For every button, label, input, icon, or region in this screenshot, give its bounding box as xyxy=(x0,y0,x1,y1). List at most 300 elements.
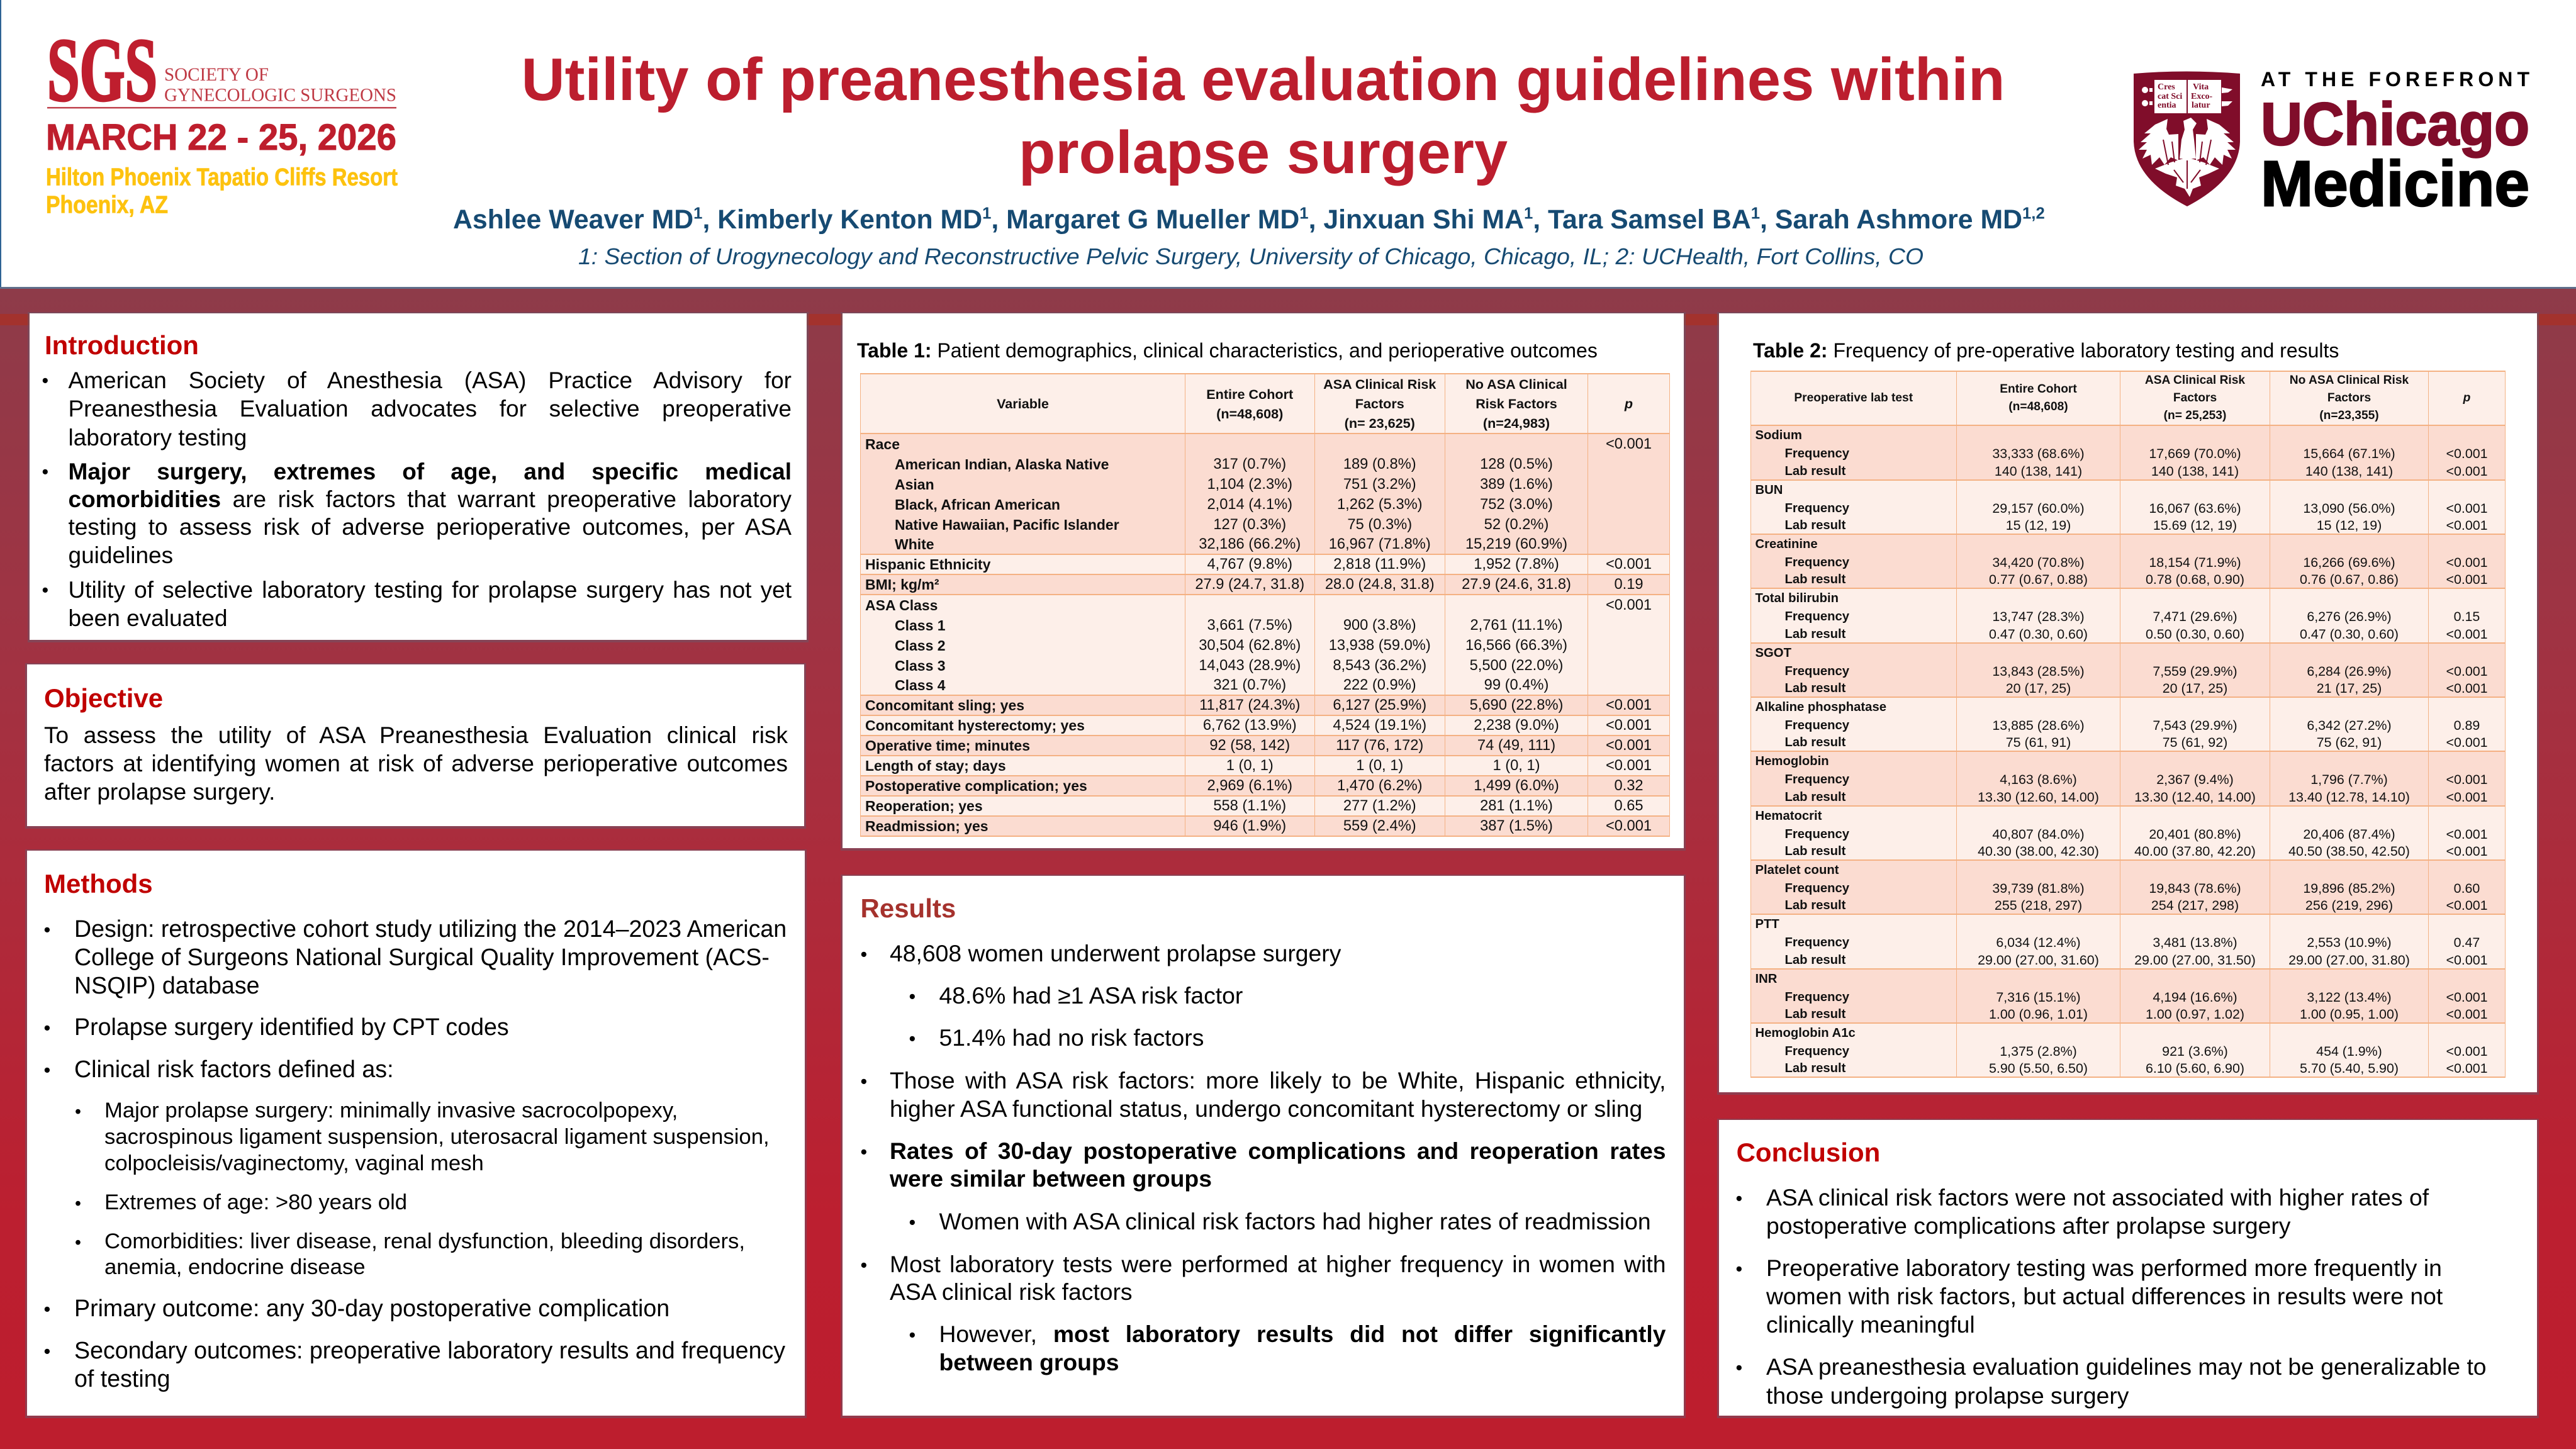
rows: alkaline phosphatase: 13,885 (28.6%) xyxy=(1992,717,2085,732)
icon: university shield: Exco- xyxy=(2191,92,2213,101)
rows: hematocrit: Hematocrit xyxy=(1756,809,1822,823)
rows: SGOT: 21 (17, 25) xyxy=(2317,681,2382,696)
text: introduction bullets: Preanesthesia Evaluation advocates for selective preoperative xyxy=(68,396,792,422)
text: methods bullets: Comorbidities: liver disease, renal dysfunction, bleeding disorders, xyxy=(104,1229,745,1253)
rows: creatinine xyxy=(1750,535,2506,589)
rows: ASA class: 30,504 (62.8%) xyxy=(1199,637,1301,654)
title: prolapse surgery xyxy=(1019,119,1508,186)
text: introduction bullets: laboratory testing xyxy=(68,425,247,450)
rows: hemoglobin A1c xyxy=(1750,1024,2506,1078)
text: results bullets xyxy=(843,939,1684,1379)
heading: conclusion: Conclusion xyxy=(1737,1138,1880,1167)
text: results bullets: 48,608 women underwent prolapse surgery xyxy=(890,940,1341,966)
rows: sodium: 140 (138, 141) xyxy=(2305,463,2393,478)
row: BMI xyxy=(860,575,1670,595)
rows: platelet count: 19,843 (78.6%) xyxy=(2149,881,2241,896)
icon: university shield: cat Sci xyxy=(2158,92,2182,101)
rows: race: 1,104 (2.3%) xyxy=(1207,476,1292,493)
table header: (n=48,608) xyxy=(2008,400,2068,413)
row: length of stay: <0.001 xyxy=(1606,758,1652,774)
rows: INR xyxy=(1750,970,2506,1024)
rows: race: American Indian, Alaska Native xyxy=(895,456,1109,473)
rows: sodium: 17,669 (70.0%) xyxy=(2149,445,2241,461)
rows: sodium: 140 (138, 141) xyxy=(2151,463,2239,478)
text: introduction bullets: Utility of selective laboratory testing for prolapse surgery has not yet xyxy=(68,577,792,603)
rows: creatinine: 16,266 (69.6%) xyxy=(2303,555,2395,570)
rows: SGOT: 20 (17, 25) xyxy=(2006,681,2071,696)
rows: hemoglobin: 1,796 (7.7%) xyxy=(2310,771,2388,786)
rows: sodium: Sodium xyxy=(1756,428,1802,442)
logo: UChicago Medicine: AT THE FOREFRONT xyxy=(2261,68,2529,91)
rows: hematocrit: 40.00 (37.80, 42.20) xyxy=(2134,844,2256,859)
rows: hemoglobin: Frequency xyxy=(1784,773,1849,786)
text: introduction bullets: Major surgery, extremes of age, and specific medical xyxy=(68,459,792,484)
rows: PTT: Frequency xyxy=(1784,935,1849,949)
rows: hemoglobin A1c: 921 (3.6%) xyxy=(2162,1043,2228,1058)
row: length of stay xyxy=(860,756,1670,776)
row: concomitant sling: 5,690 (22.8%) xyxy=(1470,697,1563,713)
rows: ASA class: 321 (0.7%) xyxy=(1213,677,1286,693)
rows: BUN: <0.001 xyxy=(2446,501,2488,516)
text: results bullets: Women with ASA clinical risk factors had higher rates of readmission xyxy=(939,1208,1651,1234)
rows: PTT: 6,034 (12.4%) xyxy=(1996,935,2081,950)
rows: platelet count: 256 (219, 296) xyxy=(2305,898,2393,913)
text: results bullets: 51.4% had no risk factors xyxy=(939,1024,1204,1051)
row: reoperation: 0.65 xyxy=(1614,798,1644,814)
rows: total bilirubin: 0.47 (0.30, 0.60) xyxy=(1989,627,2088,642)
rows: alkaline phosphatase: 6,342 (27.2%) xyxy=(2307,717,2392,732)
rows: SGOT: 7,559 (29.9%) xyxy=(2153,663,2237,678)
row: reoperation: Reoperation; yes xyxy=(865,798,983,814)
row: hispanic ethnicity xyxy=(860,555,1670,575)
rows: creatinine: 34,420 (70.8%) xyxy=(1992,555,2085,570)
rows: creatinine: Lab result xyxy=(1784,573,1845,586)
text: methods bullets: Prolapse surgery identified by CPT codes xyxy=(74,1014,509,1040)
rows: SGOT: 13,843 (28.5%) xyxy=(1992,663,2085,678)
rows: ASA class: Class 4 xyxy=(895,677,946,693)
rows: alkaline phosphatase: 75 (61, 91) xyxy=(2006,735,2071,750)
table header: Variable xyxy=(997,396,1049,411)
rows: sodium: Lab result xyxy=(1784,464,1845,478)
rows: BUN: 15 (12, 19) xyxy=(2006,518,2071,533)
text: results bullets: • xyxy=(861,944,867,965)
rows: hemoglobin: 13.40 (12.78, 14.10) xyxy=(2288,789,2410,804)
text: conclusion bullets: women with risk factors, but actual differences in results were not xyxy=(1766,1283,2443,1309)
title xyxy=(521,46,2005,186)
text: conclusion bullets xyxy=(1719,1183,2537,1413)
rows: alkaline phosphatase: Alkaline phosphatase xyxy=(1756,700,1886,713)
rows: ASA class: ASA Class xyxy=(865,597,938,613)
rows: race: 52 (0.2%) xyxy=(1484,517,1548,533)
rows: hematocrit: 40,807 (84.0%) xyxy=(1992,827,2085,842)
row: operative time: 117 (76, 172) xyxy=(1336,737,1423,754)
caption: table 2: Table 2: Frequency of pre-operative laboratory testing and results xyxy=(1753,339,2339,362)
row: hispanic ethnicity: <0.001 xyxy=(1606,556,1652,573)
table header: ASA Clinical Risk xyxy=(2145,374,2245,387)
rows: ASA class: 3,661 (7.5%) xyxy=(1207,617,1292,634)
rows: hemoglobin xyxy=(1750,752,2506,807)
text: methods bullets: • xyxy=(75,1193,81,1213)
text: results bullets: 48.6% had ≥1 ASA risk factor xyxy=(939,982,1243,1009)
rows: hematocrit: 40.30 (38.00, 42.30) xyxy=(1978,844,2099,859)
row: readmission: <0.001 xyxy=(1606,818,1652,834)
text: methods bullets: of testing xyxy=(74,1365,170,1392)
text: introduction bullets: testing to assess risk of adverse perioperative outcomes, per ASA xyxy=(68,514,792,540)
rows: total bilirubin: Frequency xyxy=(1784,609,1849,623)
rows: SGOT: SGOT xyxy=(1756,646,1791,659)
rows: sodium xyxy=(1750,426,2506,481)
text: results bullets: • xyxy=(909,986,916,1007)
text: introduction bullets: guidelines xyxy=(68,542,173,568)
table header: Factors xyxy=(2173,391,2217,405)
rows: total bilirubin: Lab result xyxy=(1784,627,1845,641)
text: methods bullets: • xyxy=(44,1340,50,1362)
text: results bullets: • xyxy=(909,1028,916,1049)
rows: ASA class: 2,761 (11.1%) xyxy=(1470,617,1563,634)
panel: results xyxy=(843,876,1684,1416)
text: objective statement: after prolapse surgery. xyxy=(44,779,275,805)
text: objective statement xyxy=(44,722,788,805)
rows: hematocrit: <0.001 xyxy=(2446,827,2488,842)
text: methods bullets: College of Surgeons National Surgical Quality Improvement (ACS- xyxy=(74,944,770,970)
rows: PTT: <0.001 xyxy=(2446,953,2488,968)
text: methods bullets: Design: retrospective cohort study utilizing the 2014–2023 American xyxy=(74,915,787,941)
rows: ASA class: <0.001 xyxy=(1606,597,1652,613)
rows: INR: <0.001 xyxy=(2446,989,2488,1004)
row: concomitant hysterectomy: 6,762 (13.9%) xyxy=(1203,717,1297,734)
rows: platelet count: 39,739 (81.8%) xyxy=(1992,881,2085,896)
rows: total bilirubin: 7,471 (29.6%) xyxy=(2153,609,2237,624)
rows: creatinine: <0.001 xyxy=(2446,572,2488,587)
panel: introduction xyxy=(30,313,807,640)
text: conclusion bullets: • xyxy=(1735,1188,1742,1209)
rows: alkaline phosphatase xyxy=(1750,698,2506,752)
rows: INR: 1.00 (0.95, 1.00) xyxy=(2300,1007,2399,1022)
rows: race: 75 (0.3%) xyxy=(1347,517,1412,533)
rows: platelet count: 0.60 xyxy=(2454,881,2480,896)
rows: SGOT: 20 (17, 25) xyxy=(2163,681,2227,696)
rows: total bilirubin: 6,276 (26.9%) xyxy=(2307,609,2392,624)
logo: Society of Gynecologic Surgeons meeting: MARCH 22 - 25, 2026 xyxy=(46,117,396,158)
rows: race: Black, African American xyxy=(895,496,1060,513)
rows: hematocrit: Frequency xyxy=(1784,827,1849,841)
row: operative time: 74 (49, 111) xyxy=(1477,737,1555,754)
rows: hemoglobin A1c: <0.001 xyxy=(2446,1043,2488,1058)
rows: PTT: 29.00 (27.00, 31.60) xyxy=(1978,953,2099,968)
table header: No ASA Clinical Risk xyxy=(2290,374,2409,387)
rows: hemoglobin: 4,163 (8.6%) xyxy=(2000,771,2077,786)
rows: hematocrit: 20,401 (80.8%) xyxy=(2149,827,2241,842)
row: operative time xyxy=(860,736,1670,756)
table: patient demographics xyxy=(860,373,1670,837)
caption: table 1: Table 1: Patient demographics, clinical characteristics, and perioperative outcomes xyxy=(857,339,1598,362)
row: BMI: 27.9 (24.6, 31.8) xyxy=(1462,576,1571,593)
rows: alkaline phosphatase: 75 (61, 92) xyxy=(2163,735,2227,750)
text: introduction bullets: been evaluated xyxy=(68,605,228,631)
rows: PTT: Lab result xyxy=(1784,953,1845,966)
rows: race: 15,219 (60.9%) xyxy=(1465,536,1567,552)
rows: sodium: 140 (138, 141) xyxy=(1995,463,2082,478)
affiliations: 1: Section of Urogynecology and Reconstructive Pelvic Surgery, University of Chicago, Chicago, IL; 2: UCHealth, Fort Collins, CO xyxy=(578,243,1924,269)
table header: Entire Cohort xyxy=(2000,383,2077,396)
rows: platelet count: <0.001 xyxy=(2446,898,2488,913)
rows: alkaline phosphatase: Lab result xyxy=(1784,736,1845,749)
text: conclusion bullets: ASA clinical risk factors were not associated with higher rates of xyxy=(1766,1184,2429,1211)
rows: platelet count xyxy=(1750,861,2506,915)
rows: creatinine: 18,154 (71.9%) xyxy=(2149,555,2241,570)
icon: university shield: latur xyxy=(2192,101,2210,110)
rows: hemoglobin: <0.001 xyxy=(2446,771,2488,786)
rows: BUN: 15.69 (12, 19) xyxy=(2153,518,2237,533)
rows: ASA class: 5,500 (22.0%) xyxy=(1470,657,1563,674)
row: concomitant hysterectomy: Concomitant hysterectomy; yes xyxy=(865,717,1085,734)
rows: hemoglobin: 13.30 (12.40, 14.00) xyxy=(2134,789,2256,804)
rows: ASA class: 14,043 (28.9%) xyxy=(1199,657,1301,674)
rows: ASA class: 8,543 (36.2%) xyxy=(1333,657,1426,674)
rows: total bilirubin: 0.50 (0.30, 0.60) xyxy=(2146,627,2244,642)
row: operative time: <0.001 xyxy=(1606,737,1652,754)
text: conclusion bullets: Preoperative laboratory testing was performed more frequently in xyxy=(1766,1255,2442,1281)
table header: ASA Clinical Risk xyxy=(1323,376,1436,392)
logo: Society of Gynecologic Surgeons meeting: GYNECOLOGIC SURGEONS xyxy=(164,84,396,106)
row: postoperative complication: 1,499 (6.0%) xyxy=(1474,778,1559,794)
row: BMI: 0.19 xyxy=(1614,576,1644,593)
rows: sodium: 15,664 (67.1%) xyxy=(2303,445,2395,461)
panel: conclusion xyxy=(1719,1120,2537,1416)
rows: INR: 4,194 (16.6%) xyxy=(2153,989,2237,1004)
text: results bullets: were similar between groups xyxy=(890,1165,1212,1192)
text: introduction bullets: • xyxy=(42,580,48,601)
text: results bullets: Most laboratory tests were performed at higher frequency in women with xyxy=(890,1251,1666,1277)
rows: ASA class: 222 (0.9%) xyxy=(1343,677,1416,693)
row: reoperation: 558 (1.1%) xyxy=(1213,798,1286,814)
row: hispanic ethnicity: 4,767 (9.8%) xyxy=(1207,556,1292,573)
rows: ASA class: 13,938 (59.0%) xyxy=(1329,637,1431,654)
text: methods bullets: • xyxy=(75,1101,81,1121)
text: methods bullets: • xyxy=(44,1298,50,1320)
rows: platelet count: 254 (217, 298) xyxy=(2151,898,2239,913)
rows: BUN: <0.001 xyxy=(2446,518,2488,533)
rows: race: 389 (1.6%) xyxy=(1480,476,1553,493)
rows: ASA class xyxy=(860,595,1670,696)
row: concomitant hysterectomy xyxy=(860,716,1670,736)
table header: p xyxy=(1625,396,1633,411)
rows: hemoglobin: 13.30 (12.60, 14.00) xyxy=(1978,789,2099,804)
rows: race: 128 (0.5%) xyxy=(1480,456,1553,473)
rows: total bilirubin xyxy=(1750,589,2506,644)
row: concomitant sling: Concomitant sling; yes xyxy=(865,697,1024,713)
table header: Risk Factors xyxy=(1476,396,1557,411)
row: length of stay: 1 (0, 1) xyxy=(1356,758,1403,774)
text: conclusion bullets: • xyxy=(1735,1258,1742,1280)
rows: INR: <0.001 xyxy=(2446,1007,2488,1022)
text: results bullets: • xyxy=(861,1255,867,1276)
row: concomitant hysterectomy: 4,524 (19.1%) xyxy=(1333,717,1426,734)
text: methods bullets xyxy=(44,915,787,1392)
rows: PTT: PTT xyxy=(1756,917,1779,931)
rows: BUN: 13,090 (56.0%) xyxy=(2303,501,2395,516)
row: concomitant sling: 6,127 (25.9%) xyxy=(1333,697,1426,713)
rows: total bilirubin: 0.47 (0.30, 0.60) xyxy=(2300,627,2399,642)
text: introduction bullets: comorbidities are risk factors that warrant preoperative laboratory xyxy=(68,486,792,512)
row: hispanic ethnicity: Hispanic Ethnicity xyxy=(865,556,990,573)
rows: total bilirubin: Total bilirubin xyxy=(1756,591,1839,605)
rows: race: 16,967 (71.8%) xyxy=(1329,536,1431,552)
text: results bullets: Those with ASA risk factors: more likely to be White, Hispanic ethnicity, xyxy=(890,1067,1666,1094)
rows: BUN: 29,157 (60.0%) xyxy=(1992,501,2085,516)
text: results bullets: higher ASA functional status, undergo concomitant hysterectomy or sling xyxy=(890,1095,1642,1122)
rows: race: 751 (3.2%) xyxy=(1343,476,1416,493)
rows: alkaline phosphatase: 75 (62, 91) xyxy=(2317,735,2382,750)
rows: ASA class: Class 3 xyxy=(895,657,946,674)
row: readmission: 559 (2.4%) xyxy=(1343,818,1416,834)
rows: creatinine: 0.76 (0.67, 0.86) xyxy=(2300,572,2399,587)
rows: SGOT: <0.001 xyxy=(2446,681,2488,696)
text: methods bullets: • xyxy=(44,919,50,940)
text: conclusion bullets: clinically meaningful xyxy=(1766,1311,1975,1338)
rows: creatinine: 0.77 (0.67, 0.88) xyxy=(1989,572,2088,587)
rows: platelet count: 255 (218, 297) xyxy=(1995,898,2082,913)
logo: UChicago Medicine xyxy=(2134,68,2529,220)
table header: Factors xyxy=(1355,396,1404,411)
table header: Preoperative lab test xyxy=(1794,391,1913,405)
rows: alkaline phosphatase: Frequency xyxy=(1784,719,1849,732)
row: postoperative complication: 2,969 (6.1%) xyxy=(1207,778,1292,794)
logo: UChicago Medicine: UChicago xyxy=(2261,91,2529,158)
rows: sodium: <0.001 xyxy=(2446,445,2488,461)
rows: hematocrit: <0.001 xyxy=(2446,844,2488,859)
row: postoperative complication: 0.32 xyxy=(1614,778,1644,794)
panel: objective xyxy=(27,664,804,826)
rows: hemoglobin A1c: 5.90 (5.50, 6.50) xyxy=(1989,1061,2088,1076)
text: methods bullets: Clinical risk factors defined as: xyxy=(74,1056,394,1082)
rows: platelet count: Platelet count xyxy=(1756,863,1839,877)
rows: hemoglobin A1c: 454 (1.9%) xyxy=(2316,1043,2382,1058)
table header: p xyxy=(2463,391,2470,405)
rows: creatinine: Creatinine xyxy=(1756,537,1818,551)
text: results bullets: between groups xyxy=(939,1349,1119,1375)
rows: hemoglobin A1c: Frequency xyxy=(1784,1044,1849,1058)
text: conclusion bullets: • xyxy=(1735,1357,1742,1379)
logo: Society of Gynecologic Surgeons meeting: SOCIETY OF xyxy=(164,64,269,85)
rows: total bilirubin: 13,747 (28.3%) xyxy=(1992,609,2085,624)
text: introduction bullets: • xyxy=(42,462,48,483)
rows: sodium: <0.001 xyxy=(2446,463,2488,478)
rows: PTT: 29.00 (27.00, 31.80) xyxy=(2288,953,2410,968)
rows: race: 2,014 (4.1%) xyxy=(1207,496,1292,513)
text: conclusion bullets: those undergoing prolapse surgery xyxy=(1766,1382,2129,1409)
text: methods bullets: sacrospinous ligament suspension, uterosacral ligament suspension, xyxy=(104,1125,770,1149)
text: introduction bullets xyxy=(42,367,792,631)
rows: hemoglobin A1c: 5.70 (5.40, 5.90) xyxy=(2300,1061,2399,1076)
text: methods bullets: Major prolapse surgery: minimally invasive sacrocolpopexy, xyxy=(104,1099,678,1122)
rows: BUN: Frequency xyxy=(1784,501,1849,515)
rows: BUN: Lab result xyxy=(1784,518,1845,532)
rows: hemoglobin A1c: 1,375 (2.8%) xyxy=(2000,1043,2077,1058)
rows: hematocrit: Lab result xyxy=(1784,844,1845,858)
rows: INR: 1.00 (0.96, 1.01) xyxy=(1989,1007,2088,1022)
heading: results: Results xyxy=(861,893,956,923)
rows: hematocrit: 40.50 (38.50, 42.50) xyxy=(2288,844,2410,859)
rows: SGOT xyxy=(1750,644,2506,698)
rows: SGOT: Lab result xyxy=(1784,681,1845,695)
panel: methods xyxy=(27,851,805,1416)
text: methods bullets: colpocleisis/vaginectomy, vaginal mesh xyxy=(104,1151,484,1175)
table: preoperative laboratory tests xyxy=(1750,371,2506,1078)
rows: hemoglobin A1c: <0.001 xyxy=(2446,1061,2488,1076)
row: reoperation: 281 (1.1%) xyxy=(1480,798,1553,814)
row: readmission: 946 (1.9%) xyxy=(1213,818,1286,834)
rows: SGOT: 6,284 (26.9%) xyxy=(2307,663,2392,678)
rows: hemoglobin A1c: Lab result xyxy=(1784,1061,1845,1075)
table header: (n=23,355) xyxy=(2319,409,2379,422)
row: postoperative complication: 1,470 (6.2%) xyxy=(1337,778,1423,794)
text: results bullets: ASA clinical risk factors xyxy=(890,1278,1133,1305)
rows: INR: 3,122 (13.4%) xyxy=(2307,989,2392,1004)
rows: INR: 1.00 (0.97, 1.02) xyxy=(2146,1007,2244,1022)
text: methods bullets: Secondary outcomes: preoperative laboratory results and frequency xyxy=(74,1337,785,1363)
text: methods bullets: Primary outcome: any 30-day postoperative complication xyxy=(74,1295,669,1321)
row: reoperation xyxy=(860,797,1670,817)
rows: BUN xyxy=(1750,481,2506,535)
table header: No ASA Clinical xyxy=(1465,376,1567,392)
rows: race: Race xyxy=(865,436,900,452)
rows: race: 317 (0.7%) xyxy=(1213,456,1286,473)
rows: PTT: 0.47 xyxy=(2454,935,2480,950)
rows: hemoglobin A1c: 6.10 (5.60, 6.90) xyxy=(2146,1061,2244,1076)
rows: INR: 7,316 (15.1%) xyxy=(1996,989,2081,1004)
rows: hemoglobin: Hemoglobin xyxy=(1756,754,1829,768)
rows: sodium: 33,333 (68.6%) xyxy=(1992,445,2085,461)
text: methods bullets: • xyxy=(44,1059,50,1081)
rows: race: 752 (3.0%) xyxy=(1480,496,1553,513)
rows: hemoglobin A1c: Hemoglobin A1c xyxy=(1756,1026,1856,1039)
text: objective statement: factors at identifying women at risk of adverse perioperative outcomes xyxy=(44,751,788,776)
rows: race: <0.001 xyxy=(1606,436,1652,452)
rows: ASA class: Class 2 xyxy=(895,637,946,654)
rows: platelet count: Lab result xyxy=(1784,898,1845,912)
text: methods bullets: • xyxy=(44,1017,50,1039)
text: methods bullets: NSQIP) database xyxy=(74,972,260,999)
table header: Entire Cohort xyxy=(1206,386,1293,401)
row: operative time: 92 (58, 142) xyxy=(1209,737,1290,754)
heading: introduction: Introduction xyxy=(45,330,199,360)
text: results bullets: • xyxy=(861,1071,867,1092)
row: operative time: Operative time; minutes xyxy=(865,737,1030,754)
row: readmission: 387 (1.5%) xyxy=(1480,818,1553,834)
rows: ASA class: Class 1 xyxy=(895,617,946,634)
row: postoperative complication xyxy=(860,776,1670,797)
rows: sodium: Frequency xyxy=(1784,447,1849,461)
text: results bullets: • xyxy=(861,1141,867,1163)
rows: SGOT: <0.001 xyxy=(2446,663,2488,678)
rows: ASA class: 99 (0.4%) xyxy=(1484,677,1548,693)
row: readmission: Readmission; yes xyxy=(865,818,988,834)
row: concomitant sling: 11,817 (24.3%) xyxy=(1199,697,1300,713)
text: introduction bullets: American Society of Anesthesia (ASA) Practice Advisory for xyxy=(68,367,792,393)
rows: INR: Lab result xyxy=(1784,1007,1845,1021)
rows: race: 1,262 (5.3%) xyxy=(1337,496,1423,513)
table header: (n= 23,625) xyxy=(1345,415,1415,431)
rows: race xyxy=(860,434,1670,555)
rows: BUN: 16,067 (63.6%) xyxy=(2149,501,2241,516)
rows: alkaline phosphatase: 7,543 (29.9%) xyxy=(2153,717,2237,732)
rows: SGOT: Frequency xyxy=(1784,664,1849,678)
row: BMI: BMI; kg/m² xyxy=(865,576,939,593)
row: reoperation: 277 (1.2%) xyxy=(1343,798,1416,814)
rows: ASA class: 900 (3.8%) xyxy=(1343,617,1416,634)
row: concomitant sling xyxy=(860,696,1670,716)
